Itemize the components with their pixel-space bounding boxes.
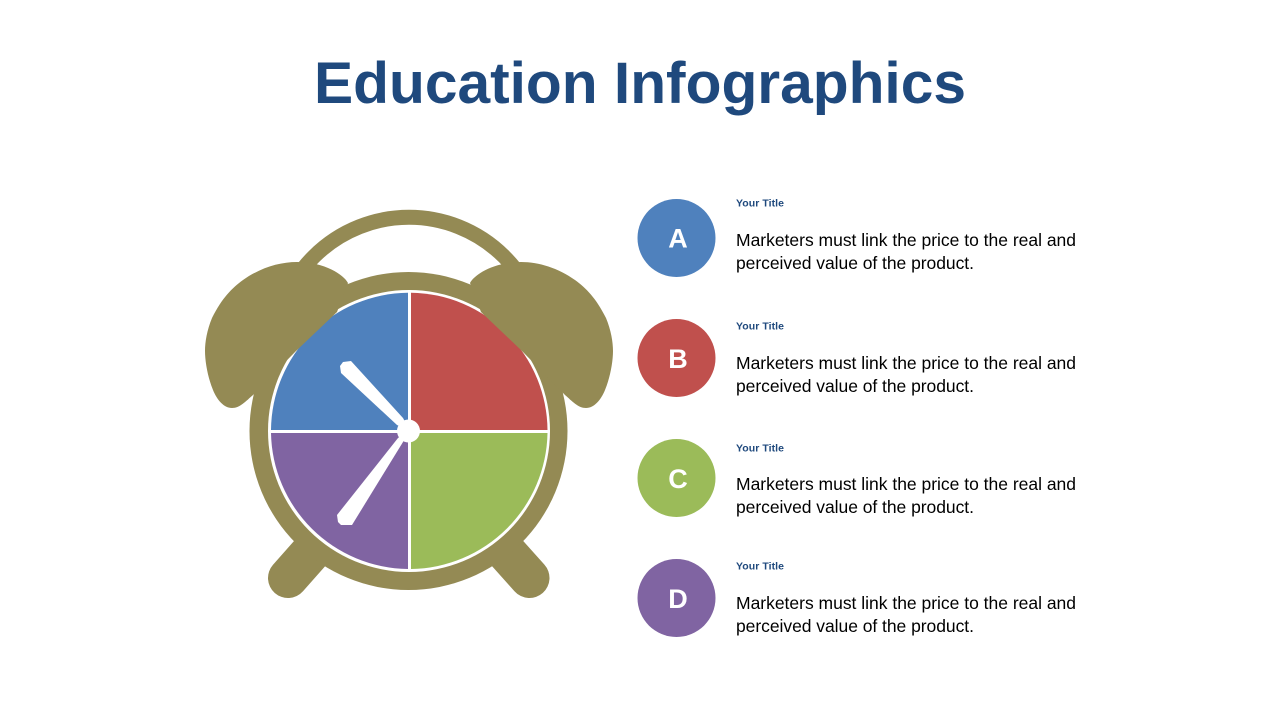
title: Education Infographics: [314, 51, 966, 116]
alarm clock illustration: [205, 217, 613, 590]
clock face quadrants: [271, 293, 548, 569]
quadrant A: blue: [271, 293, 408, 430]
hour hand: [340, 361, 410, 431]
item B: [638, 319, 1076, 397]
item D: [638, 559, 1076, 637]
item B description: Marketers must link the price to the real and: [736, 353, 1076, 373]
item C description: Marketers must link the price to the real and: [736, 474, 1076, 494]
clock outer ring: [250, 272, 568, 590]
alarm bell: left: [205, 262, 348, 408]
badge C: [638, 439, 716, 517]
item D heading: Your Title: [736, 560, 784, 572]
item B heading: Your Title: [736, 320, 784, 332]
clock foot: right: [483, 526, 530, 578]
clock face background: [268, 290, 550, 572]
badge B: [638, 319, 716, 397]
quadrant C: green: [411, 433, 548, 569]
item D description: perceived value of the product.: [736, 616, 974, 636]
item C heading: Your Title: [736, 442, 784, 454]
badge A: [638, 199, 716, 277]
clock foot: left: [288, 526, 334, 578]
item C: [638, 439, 1076, 517]
quadrant B: red: [411, 293, 548, 430]
alarm bell: right: [470, 262, 613, 408]
item C description: perceived value of the product.: [736, 497, 974, 517]
item B description: perceived value of the product.: [736, 376, 974, 396]
item A description: Marketers must link the price to the real and: [736, 230, 1076, 250]
minute hand: [337, 431, 408, 525]
clock centre pin: [397, 420, 420, 442]
badge B: B: [668, 344, 688, 374]
badge A: A: [668, 224, 688, 254]
item A: [638, 198, 1076, 277]
badge C: C: [668, 464, 688, 494]
clock handle arc: [274, 217, 544, 487]
item A description: perceived value of the product.: [736, 253, 974, 273]
item A heading: Your Title: [736, 198, 784, 210]
badge D: D: [668, 584, 688, 614]
badge D: [638, 559, 716, 637]
quadrant D: purple: [271, 433, 408, 569]
item D description: Marketers must link the price to the real and: [736, 593, 1076, 613]
